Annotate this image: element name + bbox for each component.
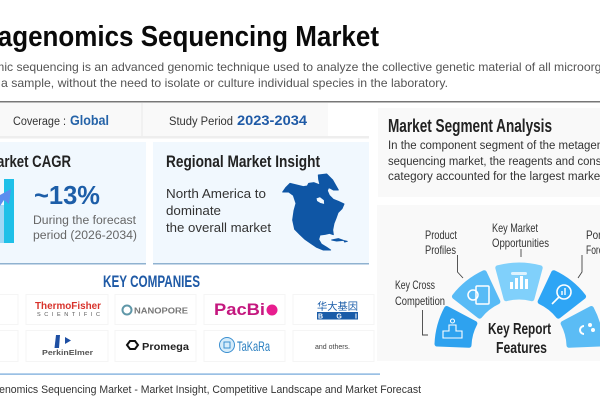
company logo cards <box>0 294 374 362</box>
regional text <box>166 187 272 235</box>
label: product profiles: Product <box>425 228 458 242</box>
logo: BGI <box>317 300 358 320</box>
label: key cross competition: Key Cross <box>395 278 435 292</box>
icon: podium <box>443 319 462 338</box>
logo: Promega: Promega <box>142 341 189 353</box>
segment: fifth feature <box>563 308 600 345</box>
logo: Nanopore <box>122 306 189 316</box>
logo: Thermo Fisher Scientific: ThermoFisher <box>35 300 101 312</box>
logo: Nanopore: NANOPORE <box>134 306 189 316</box>
regional heading: Regional Market Insight <box>166 152 320 171</box>
logo: TaKaRa <box>220 338 270 354</box>
icon: market chart <box>510 272 528 289</box>
center label <box>488 321 551 357</box>
center label: Features <box>496 340 547 357</box>
logo: Thermo Fisher Scientific <box>35 300 101 318</box>
study period value: 2023-2034 <box>237 112 307 128</box>
regional text: the overall market <box>166 221 272 235</box>
logo: BGI: 华大基因 <box>317 300 358 313</box>
CAGR note: During the forecast <box>33 215 137 227</box>
label: key market opportunities: Key Market <box>492 221 539 235</box>
CAGR note: period (2026-2034) <box>33 230 137 242</box>
coverage label: Coverage : <box>13 116 66 128</box>
icon: magnet <box>580 324 594 334</box>
label: product profiles: Profiles <box>425 243 456 257</box>
panel: regional market insight <box>153 142 369 264</box>
logo: Thermo Fisher Scientific: SCIENTIFIC <box>37 312 100 318</box>
logo: PerkinElmer: PerkinElmer <box>42 350 93 357</box>
description text <box>0 60 600 90</box>
segment heading: Market Segment Analysis <box>388 116 552 136</box>
panel: market CAGR <box>0 142 146 264</box>
regional text: dominate <box>166 204 221 218</box>
label: product profiles <box>425 228 458 257</box>
segment: key cross competition <box>437 308 475 345</box>
segment: porter's five forces <box>540 273 584 316</box>
label: key market opportunities <box>492 221 549 250</box>
coverage and study period bar <box>0 103 369 138</box>
map: North America <box>283 174 347 250</box>
study period label: Study Period <box>169 116 233 128</box>
label: key market opportunities: Opportunities <box>492 236 549 250</box>
icon: document and magnifier <box>468 286 489 304</box>
description text: a sample, without the need to isolate or culture individual species in the laboratory. <box>1 76 448 90</box>
logo: PerkinElmer <box>42 335 93 357</box>
icon: growth bar and arrow <box>0 179 14 243</box>
segment: product profiles <box>454 273 498 316</box>
regional text: North America to <box>166 187 266 201</box>
segment text <box>388 140 600 183</box>
panel: market segment analysis <box>378 108 600 197</box>
coverage value: Global <box>70 112 109 128</box>
heading: key companies: KEY COMPANIES <box>103 272 200 291</box>
logo: BGI: BGI <box>318 314 357 320</box>
icon: magnifier and chart <box>552 285 571 304</box>
panel: key report features <box>377 205 600 361</box>
segment: key market opportunities <box>498 265 540 299</box>
label: key cross competition: Competition <box>395 294 445 308</box>
logo: PacBio: PacBi <box>214 300 265 319</box>
label: porter's five forces <box>586 228 600 257</box>
CAGR value: ~13% <box>34 180 100 210</box>
label: key cross competition <box>395 278 445 308</box>
logo: TaKaRa: TaKaRa <box>237 338 270 354</box>
CAGR note <box>33 215 137 242</box>
center label: Key Report <box>488 321 551 338</box>
and others note: and others. <box>315 344 350 351</box>
